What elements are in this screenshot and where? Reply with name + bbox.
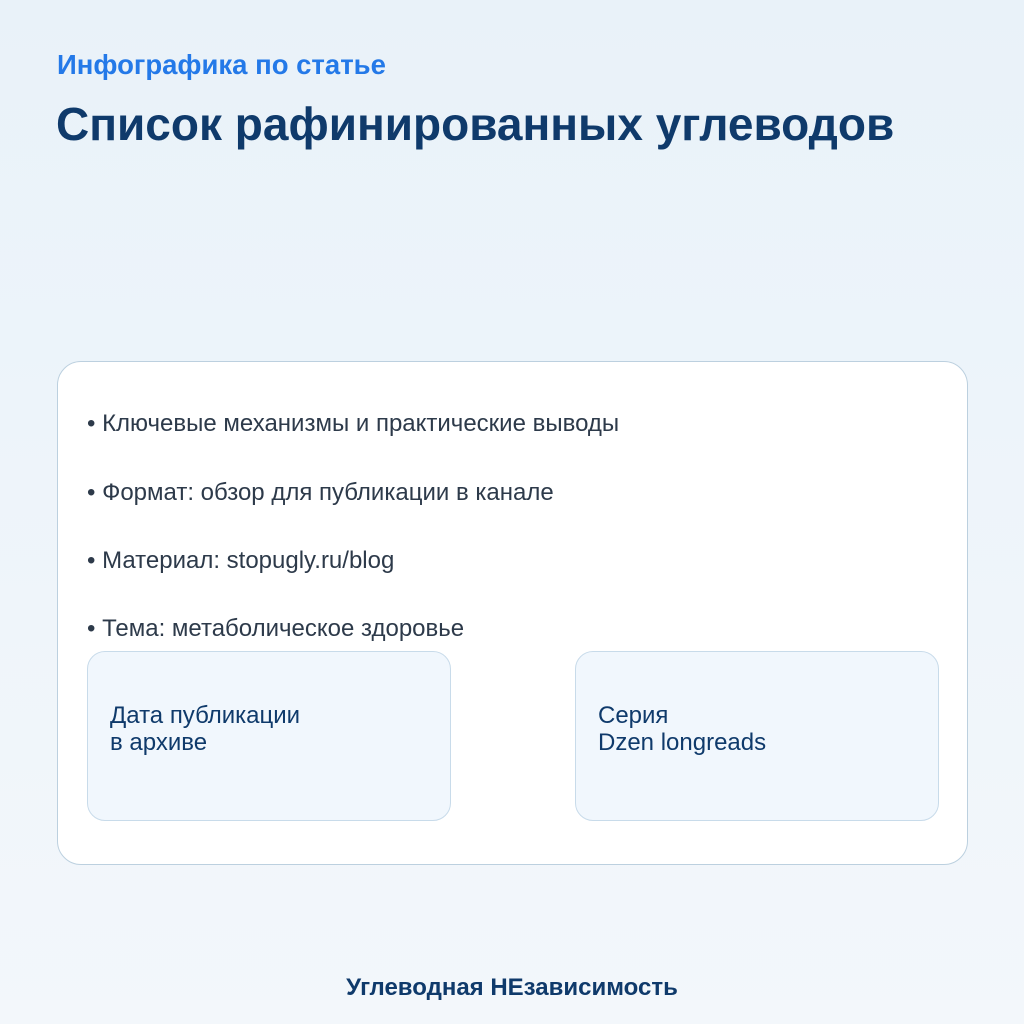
box: series bbox=[575, 651, 939, 821]
panel: main card bbox=[57, 361, 968, 865]
bullet 4: • Тема: метаболическое здоровье bbox=[87, 615, 464, 642]
title: Список рафинированных углеводов bbox=[56, 98, 894, 150]
bullet 2: • Формат: обзор для публикации в канале bbox=[87, 479, 554, 506]
bullet 1: • Ключевые механизмы и практические выводы bbox=[87, 410, 619, 437]
box: date: Дата публикации bbox=[110, 702, 300, 729]
bullet 3: • Материал: stopugly.ru/blog bbox=[87, 547, 394, 574]
footer: Углеводная НЕзависимость bbox=[346, 974, 678, 1001]
box: date: в архиве bbox=[110, 729, 207, 756]
box: date bbox=[87, 651, 451, 821]
box: series: Серия bbox=[598, 702, 668, 729]
subtitle: Инфографика по статье bbox=[57, 49, 386, 80]
box: series: Dzen longreads bbox=[598, 729, 766, 756]
